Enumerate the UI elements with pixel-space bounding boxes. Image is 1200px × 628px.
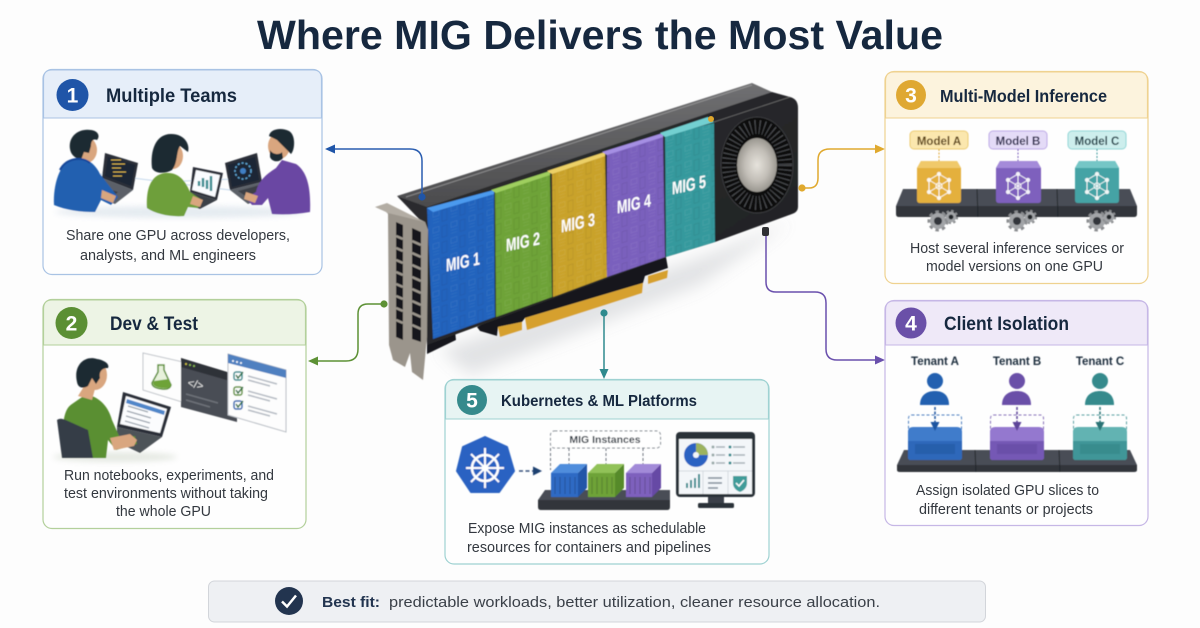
panel: Multi-Model Inference (885, 72, 1148, 284)
connector end dot on fan housing (708, 116, 714, 122)
person in green shirt (63, 358, 137, 458)
panel: MIG 5 slice (660, 117, 715, 257)
number badge (896, 80, 926, 110)
heading: Dev & Test (110, 314, 199, 335)
illustration: developer with floating windows (53, 353, 286, 462)
model A (910, 131, 968, 203)
number badge (896, 308, 926, 338)
PCB edge (477, 257, 668, 336)
tenant B: Tenant B (993, 356, 1041, 368)
tenant A: Tenant A (911, 356, 959, 368)
number badge: 2 (66, 312, 77, 336)
gold connector fingers (498, 270, 668, 337)
panel: MIG 4 slice (602, 133, 665, 277)
icon: Kubernetes wheel (457, 437, 514, 492)
heading: Multi-Model Inference (940, 86, 1107, 106)
tenant B (990, 356, 1044, 460)
connector: GPU to Multi-Model Inference (798, 144, 885, 192)
connector: GPU to Dev and Test (308, 300, 388, 366)
header band (44, 70, 321, 118)
panel: Kubernetes and ML Platforms: resources for containers and pipelines (467, 539, 711, 556)
panel: MIG 4 slice: MIG 4 (617, 190, 652, 218)
panel: Multi-Model Inference: model versions on one GPU (926, 258, 1103, 275)
platform (538, 490, 670, 510)
number badge (56, 307, 88, 339)
connector: GPU to Multiple Teams (325, 144, 426, 201)
shroud top face (397, 83, 772, 208)
cooling fan (721, 117, 793, 213)
description: Expose MIG instances as schedulable (468, 520, 706, 537)
illustration: Kubernetes to MIG instances to dashboard (457, 431, 755, 510)
metal bracket (375, 203, 428, 380)
tenant C (1073, 356, 1127, 460)
instance cubes (551, 464, 661, 497)
gears (929, 211, 1115, 230)
panel: MIG 3 slice (547, 152, 607, 297)
header band (446, 380, 768, 419)
panel: MIG 2 slice: MIG 2 (506, 229, 540, 256)
panel: MIG 1 slice (427, 190, 495, 339)
panel: MIG 3 slice: MIG 3 (561, 210, 595, 237)
number badge: 5 (466, 390, 478, 412)
shroud front face (397, 92, 798, 345)
heading: Kubernetes & ML Platforms (501, 393, 697, 410)
title: Where MIG Delivers the Most Value (257, 12, 943, 58)
card shadow (440, 222, 790, 375)
description: Assign isolated GPU slices to (916, 482, 1099, 499)
panel: GPU card illustration (375, 83, 798, 380)
panel: Multiple Teams: analysts, and ML engineers (80, 247, 256, 264)
MIG Instances label: MIG Instances (569, 434, 641, 446)
number badge (56, 79, 88, 111)
window: checklist (228, 354, 286, 432)
panel: Dev and Test: the whole GPU (116, 503, 211, 520)
panel: MIG 1 slice: MIG 1 (446, 249, 480, 276)
header band (886, 301, 1147, 345)
callout text: Best fit: (322, 594, 380, 611)
dashboard monitor (676, 432, 755, 508)
GPU platform (896, 189, 1137, 217)
panel: Dev and Test (43, 300, 306, 528)
illustration: tenants and slices (897, 356, 1137, 472)
panel: Kubernetes and ML Platforms (445, 380, 769, 564)
platform (897, 450, 1137, 472)
laptop (117, 392, 171, 453)
panel: Client Isolation (885, 300, 1148, 526)
model B: Model B (996, 136, 1040, 148)
tenant A (908, 356, 962, 460)
heading: Multiple Teams (106, 86, 237, 107)
model A: Model A (917, 136, 961, 148)
window: flask (143, 353, 183, 402)
window: code editor: </> (186, 377, 205, 393)
description: Host several inference services or (910, 240, 1124, 257)
header band (44, 300, 305, 345)
header band (886, 72, 1147, 118)
icon: check badge (275, 587, 303, 615)
model C: Model C (1075, 136, 1119, 148)
dashed arrow (519, 466, 542, 476)
model C (1068, 131, 1126, 203)
number badge: 3 (905, 84, 917, 108)
illustration: three people at laptops (54, 129, 310, 218)
window: code editor (181, 358, 237, 422)
panel: MIG 5 slice: MIG 5 (672, 172, 706, 199)
panel: Dev and Test: test environments without taking (64, 485, 268, 502)
panel: MIG 2 slice (491, 171, 552, 317)
MIG Instances label (550, 431, 660, 470)
illustration: models on platform (896, 131, 1137, 230)
person: blue hoodie (54, 130, 138, 212)
panel: Client Isolation: different tenants or projects (919, 501, 1093, 518)
number badge: 1 (67, 84, 79, 108)
connector: GPU to Kubernetes (600, 309, 608, 379)
tenant C: Tenant C (1076, 356, 1124, 368)
heading: Client Isolation (944, 314, 1069, 335)
number badge (457, 385, 487, 415)
person: purple top (225, 129, 310, 214)
person: green top (147, 134, 223, 216)
callout: best fit (208, 581, 986, 622)
model B (989, 131, 1047, 203)
description: Run notebooks, experiments, and (64, 467, 274, 484)
panel: Multiple Teams (43, 70, 322, 274)
callout: best fit: predictable workloads, better utilization, cleaner resource allocation. (389, 594, 880, 611)
description: Share one GPU across developers, (66, 227, 290, 244)
number badge: 4 (905, 312, 917, 336)
chair (57, 419, 93, 458)
connector: GPU to Client Isolation (762, 227, 885, 364)
